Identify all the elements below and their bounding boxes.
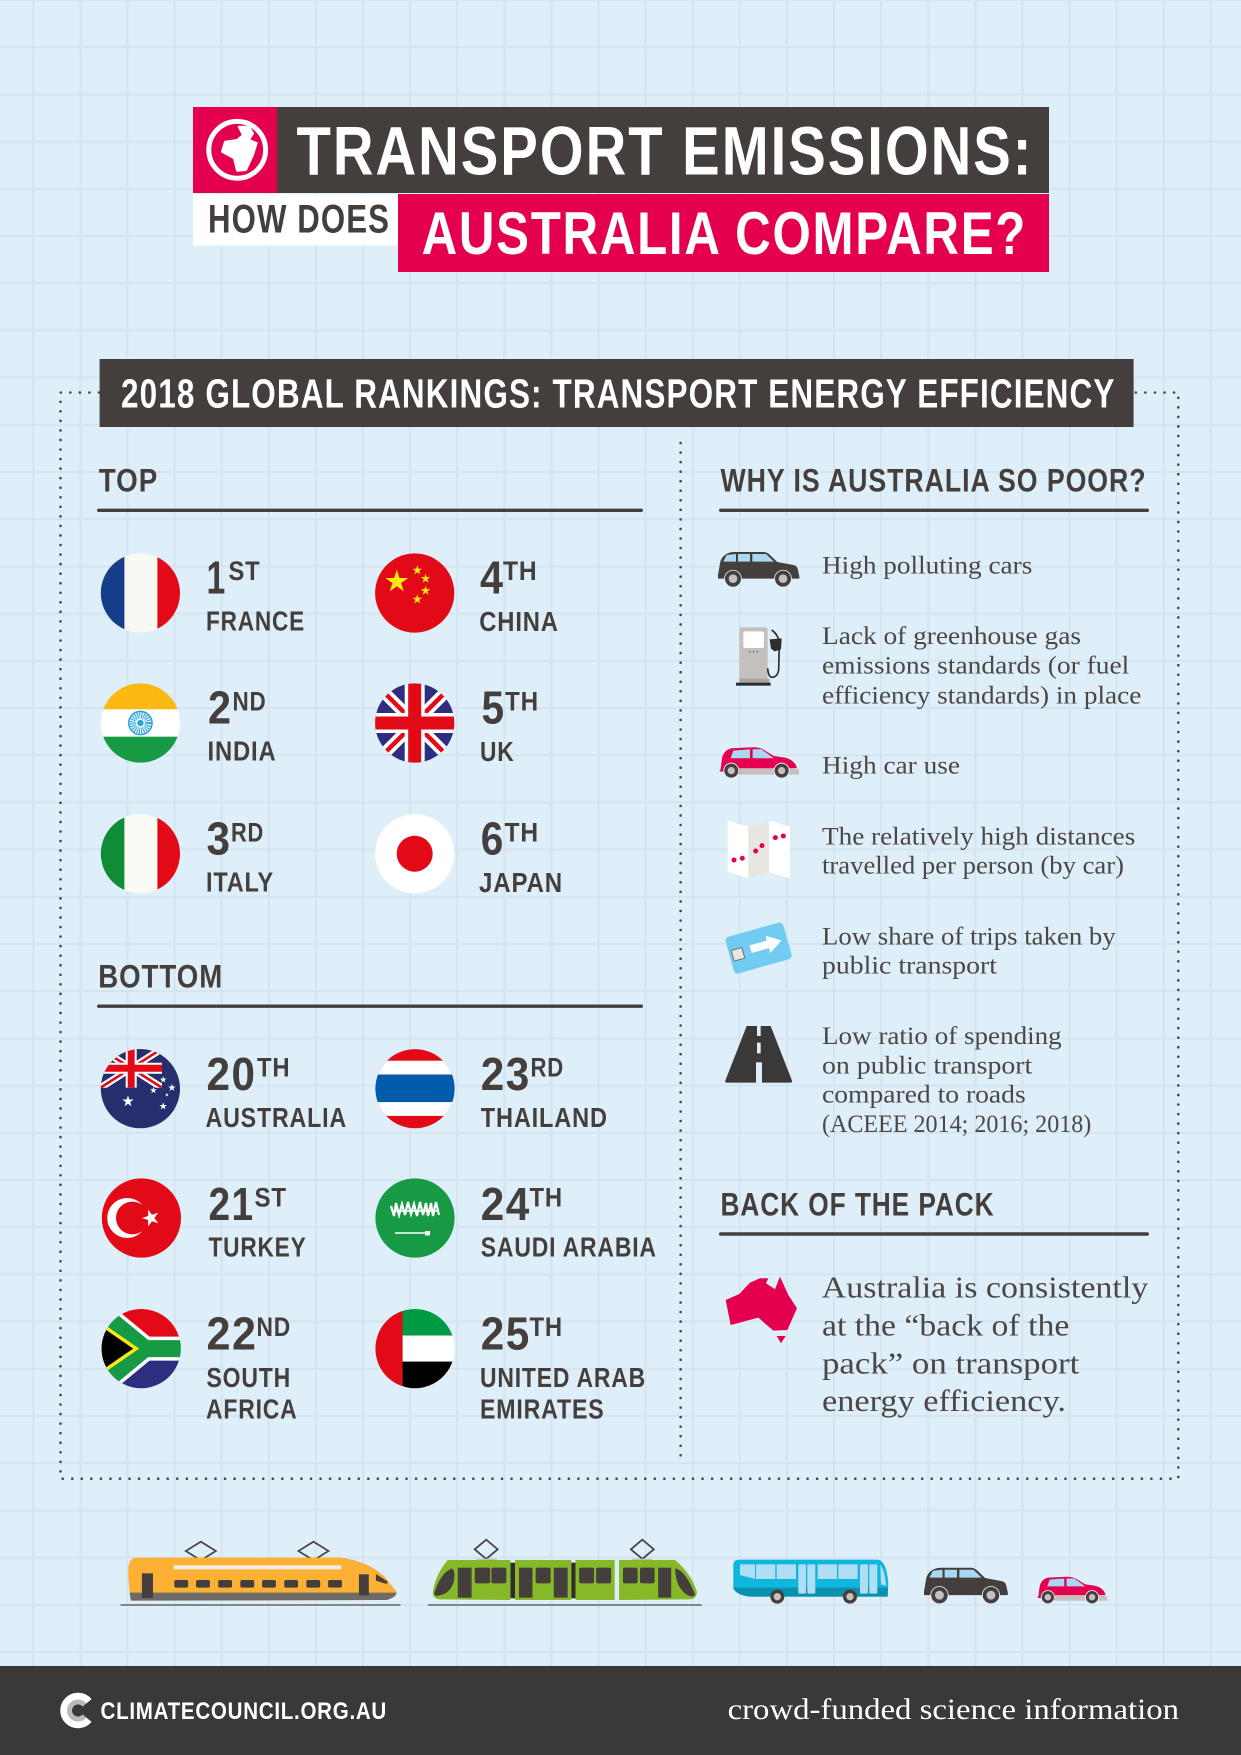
heading: top: TOP [99,462,158,499]
text: low ratio of spending: compared to roads [822,1082,1026,1109]
rank: Italy [100,812,274,898]
rank: China: TH [503,556,538,586]
heading: back of the pack [719,1187,1149,1236]
flag: UAE [375,1309,455,1389]
icon: black car [718,552,799,587]
rank: South Africa: ND [256,1312,291,1342]
rank: Japan: JAPAN [479,867,563,898]
rank: Saudi Arabia: SAUDI ARABIA [481,1232,657,1263]
rank: France: 1 [206,551,226,603]
heading: back of the pack: BACK OF THE PACK [720,1187,994,1223]
section header [100,359,1134,427]
title line 2 right: AUSTRALIA COMPARE? [422,200,1027,267]
text: high distances: The relatively high distances [822,823,1135,850]
flag: Turkey [101,1178,181,1258]
footer [0,1666,1241,1755]
icon: bus [733,1560,888,1604]
icon: yellow train [121,1542,400,1605]
rank: Thailand: 23 [481,1048,531,1100]
text: low ratio of spending: on public transport [822,1052,1032,1079]
heading: why is Australia so poor [719,462,1149,512]
heading: bottom: BOTTOM [98,959,223,995]
dotted column divider [679,443,682,1458]
title line 2 left: HOW DOES [208,198,390,242]
flag: Thailand [375,1049,455,1129]
logo mark [64,1696,89,1724]
flag: India [100,683,180,764]
rank: Italy: RD [231,818,264,848]
rank: Saudi Arabia: TH [530,1183,563,1213]
rank: India [100,681,276,767]
text: low ratio of spending [822,1023,1091,1138]
rank: Turkey: 21 [208,1178,254,1230]
transport row [121,1540,1107,1605]
rank: Turkey: ST [254,1183,287,1213]
icon: green tram [428,1540,702,1605]
flag: Australia [100,1049,180,1129]
rank: UK [375,681,539,767]
text: high distances [822,823,1135,879]
rank: Thailand [375,1048,608,1133]
rank: South Africa [102,1309,296,1419]
website: CLIMATECOUNCIL.ORG.AU [100,1698,387,1725]
icon: fuel pump [736,627,782,686]
rank: China: 4 [480,551,504,603]
rank: UAE: 25 [481,1307,531,1359]
rank: Turkey: TURKEY [208,1232,306,1263]
icon: globe [193,107,277,193]
rank: Italy: ITALY [206,867,274,898]
text: lack of standards: Lack of greenhouse gas [822,623,1081,650]
icon: black car small [924,1568,1008,1604]
rank: South Africa: AFRICA [206,1393,298,1424]
rank: South Africa: 22 [206,1307,258,1359]
rank: Japan: TH [504,818,539,848]
text: lack of standards: efficiency standards) in place [822,682,1141,709]
rank: Australia: AUSTRALIA [206,1102,347,1133]
icon: transit card [725,922,793,974]
rank: UAE [375,1307,646,1424]
text: high polluting cars: High polluting cars [822,552,1032,579]
flag: China [375,553,455,633]
icon: map [728,821,790,878]
panel: bottom rankings [91,959,657,1424]
rank: Thailand: RD [530,1053,564,1083]
rank: UK: UK [480,736,514,767]
text: back of the pack statement: at the “back of the [822,1309,1069,1343]
text: back of the pack statement [822,1271,1149,1418]
title line 2 left [193,194,398,246]
heading: top [97,462,643,512]
text: back of the pack statement: Australia is consistently [822,1271,1149,1305]
rank: Australia: TH [257,1053,290,1083]
flag: Saudi Arabia [375,1178,455,1258]
heading: bottom [97,959,643,1008]
flag: Italy [100,814,180,894]
dotted panel frame [60,392,1178,1479]
text: high distances: travelled per person (by car) [822,852,1124,879]
rank: Turkey [101,1178,306,1263]
rank: China [375,551,559,637]
rank: India: 2 [208,681,232,733]
rank: France: ST [228,556,260,586]
text: back of the pack statement: energy efficiency. [822,1384,1066,1418]
flag: UK [375,683,455,763]
icon: red car small [1037,1577,1107,1604]
icon: road [725,1025,792,1083]
rank: Italy: 3 [206,812,232,864]
rank: South Africa: SOUTH [206,1362,291,1393]
panel: back of the pack [719,1187,1149,1418]
rank: UAE: EMIRATES [480,1393,604,1424]
text: low ratio of spending: (ACEEE 2014; 2016; 2018) [822,1111,1091,1138]
flag: South Africa [102,1309,181,1388]
panel: top rankings [97,462,643,898]
rank: Japan: 6 [481,812,505,864]
rank: UK: 5 [482,681,506,733]
text: low share of trips: public transport [822,952,997,979]
flag: France [100,553,180,633]
flag: Japan [375,814,454,893]
text: low ratio of spending: Low ratio of spending [822,1023,1062,1050]
rank: Saudi Arabia: 24 [481,1178,531,1230]
text: lack of standards [822,623,1141,709]
rank: Australia [100,1048,347,1133]
rank: Thailand: THAILAND [481,1102,608,1133]
rank: China: CHINA [479,606,559,637]
rank: France [100,551,305,636]
rank: Saudi Arabia [375,1178,657,1263]
text: lack of standards: emissions standards (or fuel [822,652,1129,679]
rank: France: FRANCE [206,606,305,636]
heading: why is Australia so poor: WHY IS AUSTRALIA SO POOR? [720,462,1146,499]
text: high car use: High car use [822,752,960,779]
icon: red car [719,747,799,779]
text: low share of trips: Low share of trips taken by [822,923,1116,950]
rank: India: ND [232,687,266,717]
tagline: crowd-funded science information [728,1693,1179,1726]
text: low share of trips [822,923,1116,979]
rank: UAE: UNITED ARAB [480,1362,646,1393]
rank: Australia: 20 [206,1048,256,1100]
rank: India: INDIA [208,736,276,767]
title line 1: TRANSPORT EMISSIONS: [296,112,1034,189]
icon: Australia map [726,1277,797,1343]
text: back of the pack statement: pack” on transport [822,1346,1080,1380]
title block [193,107,1049,272]
rank: Japan [375,812,563,898]
rank: UAE: TH [530,1312,563,1342]
panel: why is Australia so poor [718,462,1149,1138]
rank: UK: TH [505,687,539,717]
